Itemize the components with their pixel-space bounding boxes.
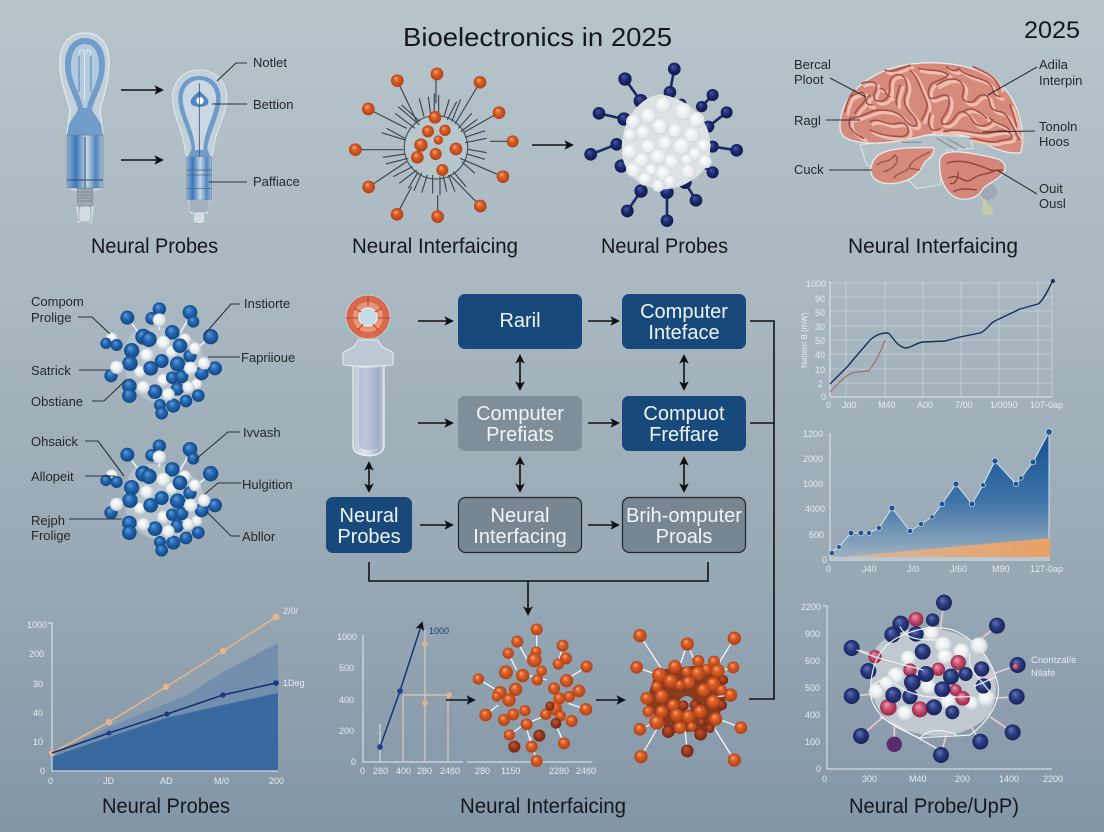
chart: bottom center with orange clusters: 1150: [501, 766, 520, 776]
chart: line chart top right: 30: [815, 322, 825, 332]
chart: area chart middle right: 4000: [805, 504, 825, 514]
cluster callout lines: [69, 304, 241, 536]
title: Bioelectronics in 2025: [403, 22, 672, 52]
chart: molecular scatter bottom right: 2200: [1043, 774, 1063, 784]
chart: line chart top right: 90: [815, 294, 825, 304]
caption: neural probes top center: Neural Probes: [601, 235, 728, 258]
chart: molecular scatter bottom right: 2200: [801, 602, 821, 612]
chart: line chart top right: A00: [917, 400, 933, 410]
chart: area and line chart bottom left: [27, 606, 305, 786]
box: Computer Inteface: [622, 294, 746, 349]
cluster labels: Fapriioue: [241, 350, 295, 365]
brain callouts: Ragl: [794, 113, 821, 128]
icon: navy and pink cluster: [844, 595, 1026, 763]
lower left lobe: [871, 148, 934, 184]
chart: area chart middle right: 0: [826, 564, 831, 574]
icon: blue cluster upper: [100, 302, 222, 420]
chart: bottom center with orange clusters: 280: [417, 766, 432, 776]
icon: orange nanoparticle hub: [349, 68, 519, 223]
chart: line chart top right: M40: [878, 400, 896, 410]
chart: area and line chart bottom left: JD: [103, 776, 114, 786]
flow arrows: [369, 321, 774, 699]
chart: line chart top right: 107-0ap: [1030, 400, 1063, 410]
chart: molecular scatter bottom right: M40: [909, 774, 927, 784]
chart: molecular scatter bottom right: [801, 595, 1076, 784]
box: Neural Interfacing: [458, 498, 582, 552]
chart: area chart middle right: 1000: [803, 479, 823, 489]
chart: line chart top right: 1000: [806, 279, 826, 289]
icon: large probe: [60, 33, 109, 222]
cluster callout: [1031, 655, 1076, 679]
box: Brih-omputer Proals: Proals: [656, 526, 712, 548]
chart: bottom center with orange clusters: 500: [339, 663, 354, 673]
box: Computer Prefiats: Prefiats: [486, 424, 554, 446]
box: Neural Interfacing: Interfacing: [473, 526, 567, 548]
caption: neural interfacing top: Neural Interfaicing: [352, 235, 518, 258]
chart: bottom center with orange clusters: 2480: [440, 766, 460, 776]
panel: flow diagram: [326, 294, 774, 699]
cluster labels: Abllor: [242, 529, 276, 544]
caption: neural interfacing top right: Neural Interfaicing: [848, 235, 1018, 258]
box: Compuot Freffare: [622, 396, 746, 451]
chart: molecular scatter bottom right: 1400: [999, 774, 1019, 784]
chart: line chart top right: 50: [815, 336, 825, 346]
chart: area chart middle right: J/0: [907, 564, 919, 574]
chart: bottom center with orange clusters: 2280: [549, 766, 569, 776]
chart: molecular scatter bottom right: 200: [955, 774, 970, 784]
chart: area and line chart bottom left: 1Deg: [283, 678, 305, 688]
chart: molecular scatter bottom right: 600: [805, 656, 820, 666]
box: Computer Prefiats: Computer: [476, 403, 564, 425]
chart: line chart top right: 10: [815, 365, 825, 375]
box: Computer Inteface: Computer: [640, 301, 728, 323]
caption: neural probe bottom right: Neural Probe/UpP): [849, 795, 1019, 818]
chart: molecular scatter bottom right: 400: [805, 710, 820, 720]
box: Computer Prefiats: [458, 396, 582, 451]
probe callouts: Notlet: [253, 55, 287, 70]
cluster labels: Instiorte: [244, 296, 290, 311]
icon: blue cluster lower: [100, 439, 222, 557]
box: Neural Interfacing: Neural: [491, 505, 549, 527]
chart: area and line chart bottom left: 1000: [27, 620, 47, 630]
chart: area and line chart bottom left: 200: [269, 776, 284, 786]
chart: molecular scatter bottom right: 300: [862, 774, 877, 784]
chart: line chart top right: 40: [815, 350, 825, 360]
box: Brih-omputer Proals: Brih-omputer: [626, 505, 742, 527]
chart: line chart top right: 7/00: [955, 400, 973, 410]
navy series: [52, 683, 276, 753]
chart: molecular scatter bottom right: 900: [805, 629, 820, 639]
chart: bottom center with orange clusters: 280: [373, 766, 388, 776]
red series: [830, 340, 885, 392]
orange series: [52, 617, 276, 753]
brain callouts: Ouit: [1039, 181, 1063, 196]
chart: area and line chart bottom left: 0: [48, 776, 53, 786]
cluster labels: Allopeit: [31, 469, 74, 484]
cluster callout: Cnontzal/e: [1031, 655, 1076, 666]
cluster labels: Ohsaick: [31, 434, 78, 449]
brain callouts: Cuck: [794, 162, 824, 177]
panel: neural probe illustrations: [60, 33, 300, 223]
chart: area and line chart bottom left: 0: [40, 766, 45, 776]
cluster labels: Obstiane: [31, 394, 83, 409]
cluster labels: Ivvash: [243, 425, 281, 440]
chart: molecular scatter bottom right: 0: [822, 774, 827, 784]
cluster labels: Hulgition: [242, 477, 293, 492]
chart: area and line chart bottom left: M/0: [214, 776, 229, 786]
chart: area chart middle right: 500: [809, 530, 824, 540]
chart: area chart middle right: J/60: [950, 564, 967, 574]
chart: area chart middle right: [803, 429, 1063, 574]
chart: area and line chart bottom left: 30: [33, 679, 43, 689]
probe callouts: Paffiace: [253, 174, 300, 189]
brain callouts: Ousl: [1039, 196, 1066, 211]
chart: line chart top right: 0: [826, 400, 831, 410]
icon: small probe: [173, 70, 227, 223]
chart: bottom center with orange clusters: 400: [339, 695, 354, 705]
chart: line chart top right: Nattern B (mW): [800, 312, 809, 368]
icon: orange cluster dense: [630, 629, 747, 767]
navy series: [830, 280, 1053, 384]
chart: bottom center with orange clusters: 0: [360, 766, 365, 776]
brain callouts: Hoos: [1039, 134, 1070, 149]
chart: area chart middle right: J40: [862, 564, 877, 574]
stem balls: [982, 195, 987, 210]
brain callouts: Tonoln: [1039, 119, 1077, 134]
box: Compuot Freffare: Compuot: [643, 403, 725, 425]
brain callouts: Bercal: [794, 57, 831, 72]
caption: neural interfacing bottom: Neural Interfaicing: [460, 795, 626, 818]
cluster labels: Prolige: [31, 310, 71, 325]
chart: area and line chart bottom left: 200: [29, 649, 44, 659]
box: Neural Probes: Probes: [337, 526, 401, 548]
brain stem connective: [860, 135, 973, 188]
lower right lobe: [940, 152, 1005, 199]
cluster labels: Rejph: [31, 513, 65, 528]
chart: bottom center with orange clusters: 2480: [576, 766, 596, 776]
box: Computer Inteface: Inteface: [648, 322, 720, 344]
icon: navy nanoparticle: [584, 63, 743, 227]
cluster labels: Frolige: [31, 528, 71, 543]
chart: area and line chart bottom left: 2/0/: [283, 606, 299, 616]
chart: bottom center with orange clusters: 0: [351, 757, 356, 767]
chart: area and line chart bottom left: AD: [160, 776, 173, 786]
probe callouts: Bettion: [253, 97, 293, 112]
cluster labels: [31, 294, 295, 544]
icon: test tube probe: [343, 295, 393, 456]
chart: molecular scatter bottom right: 0: [816, 764, 821, 774]
chart: line chart top right: [800, 279, 1063, 410]
cluster labels: Satrick: [31, 363, 71, 378]
blue series: [380, 623, 422, 747]
chart: bottom center with orange clusters: [337, 623, 747, 776]
chart: area chart middle right: 1200: [803, 429, 823, 439]
probe callouts: [209, 55, 300, 189]
chart: line chart top right: 50: [815, 308, 825, 318]
cluster labels: Compom: [31, 294, 84, 309]
chart: bottom center with orange clusters: 200: [339, 726, 354, 736]
box: Brih-omputer Proals: [622, 498, 746, 552]
chart: line chart top right: 0: [821, 392, 826, 402]
chart: area chart middle right: 127-0ap: [1030, 564, 1063, 574]
chart: area chart middle right: M90: [992, 564, 1010, 574]
arrows around clusters: [446, 699, 474, 701]
icon: brain: [840, 63, 1023, 216]
brain callouts: Ploot: [794, 72, 824, 87]
chart: area and line chart bottom left: 40: [33, 708, 43, 718]
arrows between probes: [121, 90, 162, 160]
chart: area chart middle right: 2000: [803, 454, 823, 464]
brain callouts: Adila: [1039, 57, 1069, 72]
brain callouts: Interpin: [1039, 73, 1082, 88]
box: Compuot Freffare: Freffare: [649, 424, 719, 446]
chart: molecular scatter bottom right: 100: [805, 737, 820, 747]
box: Raril: Raril: [499, 310, 541, 332]
box: Neural Probes: Neural: [340, 505, 398, 527]
year label: 2025: [1024, 17, 1080, 44]
chart: area chart middle right: 0: [822, 555, 827, 565]
chart: line chart top right: 2: [818, 379, 823, 389]
cluster callout: Nilafe: [1031, 668, 1055, 679]
brain callouts: [794, 57, 1082, 211]
chart: bottom center with orange clusters: 1000: [337, 632, 357, 642]
chart: bottom center with orange clusters: 280: [475, 766, 490, 776]
chart: bottom center with orange clusters: 1000: [429, 626, 449, 636]
chart: molecular scatter bottom right: 500: [805, 683, 820, 693]
arrow: hub to nanoparticle: [532, 144, 572, 146]
cerebrum: [840, 63, 1023, 153]
caption: neural probes top: Neural Probes: [91, 235, 218, 258]
panel: left molecular clusters: [31, 294, 295, 557]
chart: line chart top right: 1/0090: [990, 400, 1018, 410]
caption: neural probes bottom: Neural Probes: [102, 795, 230, 818]
chart: area and line chart bottom left: 10: [33, 737, 43, 747]
chart: line chart top right: Jd0: [842, 400, 857, 410]
box: Neural Probes: [326, 497, 412, 553]
box: Raril: [458, 294, 582, 349]
icon: orange cluster open: [473, 623, 593, 767]
chart: bottom center with orange clusters: 400: [396, 766, 411, 776]
